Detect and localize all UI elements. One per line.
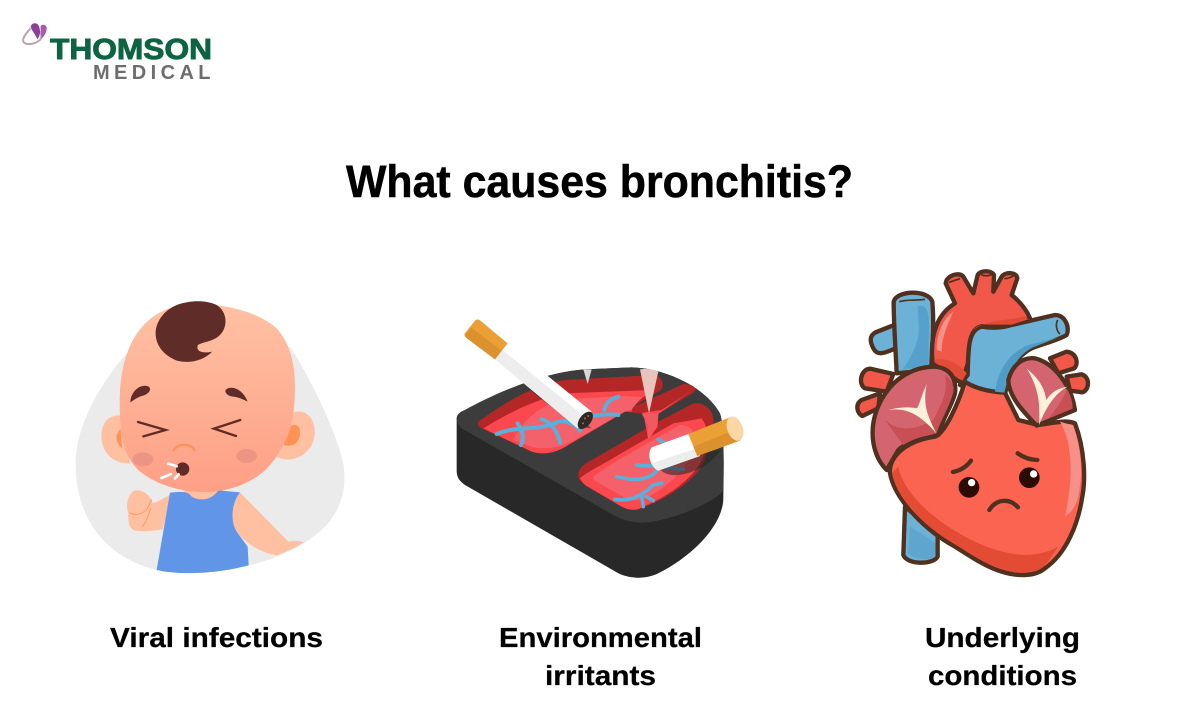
left arm and fist — [127, 490, 172, 531]
nose — [173, 445, 195, 451]
left lung pocket — [478, 375, 663, 453]
cigarette left — [464, 319, 596, 432]
right lung veins — [615, 439, 683, 507]
blue singlet — [157, 490, 249, 573]
inferior vena cava — [903, 507, 938, 563]
label: Underlying conditions: conditions — [928, 660, 1077, 691]
squeezed eyes — [138, 420, 240, 436]
right ear — [276, 412, 315, 460]
mouth and cough droplets — [161, 462, 189, 478]
vein left branch — [871, 324, 898, 353]
label: Viral infections: Viral infections — [110, 622, 323, 653]
eyebrows — [130, 386, 248, 402]
left ear — [101, 416, 130, 463]
head — [120, 304, 295, 492]
body shading — [892, 306, 1081, 573]
right vessels — [1050, 352, 1077, 373]
right arm — [233, 492, 304, 555]
trachea stem — [633, 384, 695, 440]
vessel openings — [899, 275, 1060, 334]
right atrium — [1008, 358, 1075, 426]
grey blob background — [76, 347, 344, 573]
left vessels — [861, 369, 893, 392]
sad face — [953, 453, 1040, 510]
title: What causes bronchitis? — [346, 156, 853, 207]
ashtray side — [457, 367, 724, 578]
cigarette right — [649, 414, 747, 475]
main heart body — [890, 382, 1084, 575]
neck — [183, 479, 223, 501]
pulmonary artery — [960, 315, 1068, 395]
smoke wisps — [583, 369, 658, 413]
wordmark: MEDICAL: MEDICAL — [93, 62, 215, 84]
label: Underlying conditions — [925, 622, 1080, 691]
dark cigarette shadow left — [530, 390, 592, 428]
illustration: coughing baby — [76, 301, 344, 573]
aorta — [932, 271, 1030, 383]
left atrium — [873, 367, 955, 470]
icon: butterfly heart — [23, 23, 47, 44]
wordmark: THOMSON: THOMSON — [50, 34, 212, 66]
right lung pocket — [578, 403, 714, 510]
ashtray top — [457, 367, 724, 523]
superior vena cava — [894, 293, 933, 373]
logo: Thomson Medical — [23, 23, 215, 84]
cheeks — [133, 449, 257, 466]
illustration: lung ashtray with cigarettes — [457, 319, 747, 578]
hair — [156, 301, 226, 362]
label: Underlying conditions: Underlying — [925, 622, 1080, 653]
label: Environmental irritants — [499, 622, 702, 691]
left lung veins — [497, 397, 618, 445]
label: Environmental irritants: Environmental — [499, 622, 702, 653]
label: Environmental irritants: irritants — [545, 660, 656, 691]
illustration: sad heart — [857, 271, 1088, 575]
